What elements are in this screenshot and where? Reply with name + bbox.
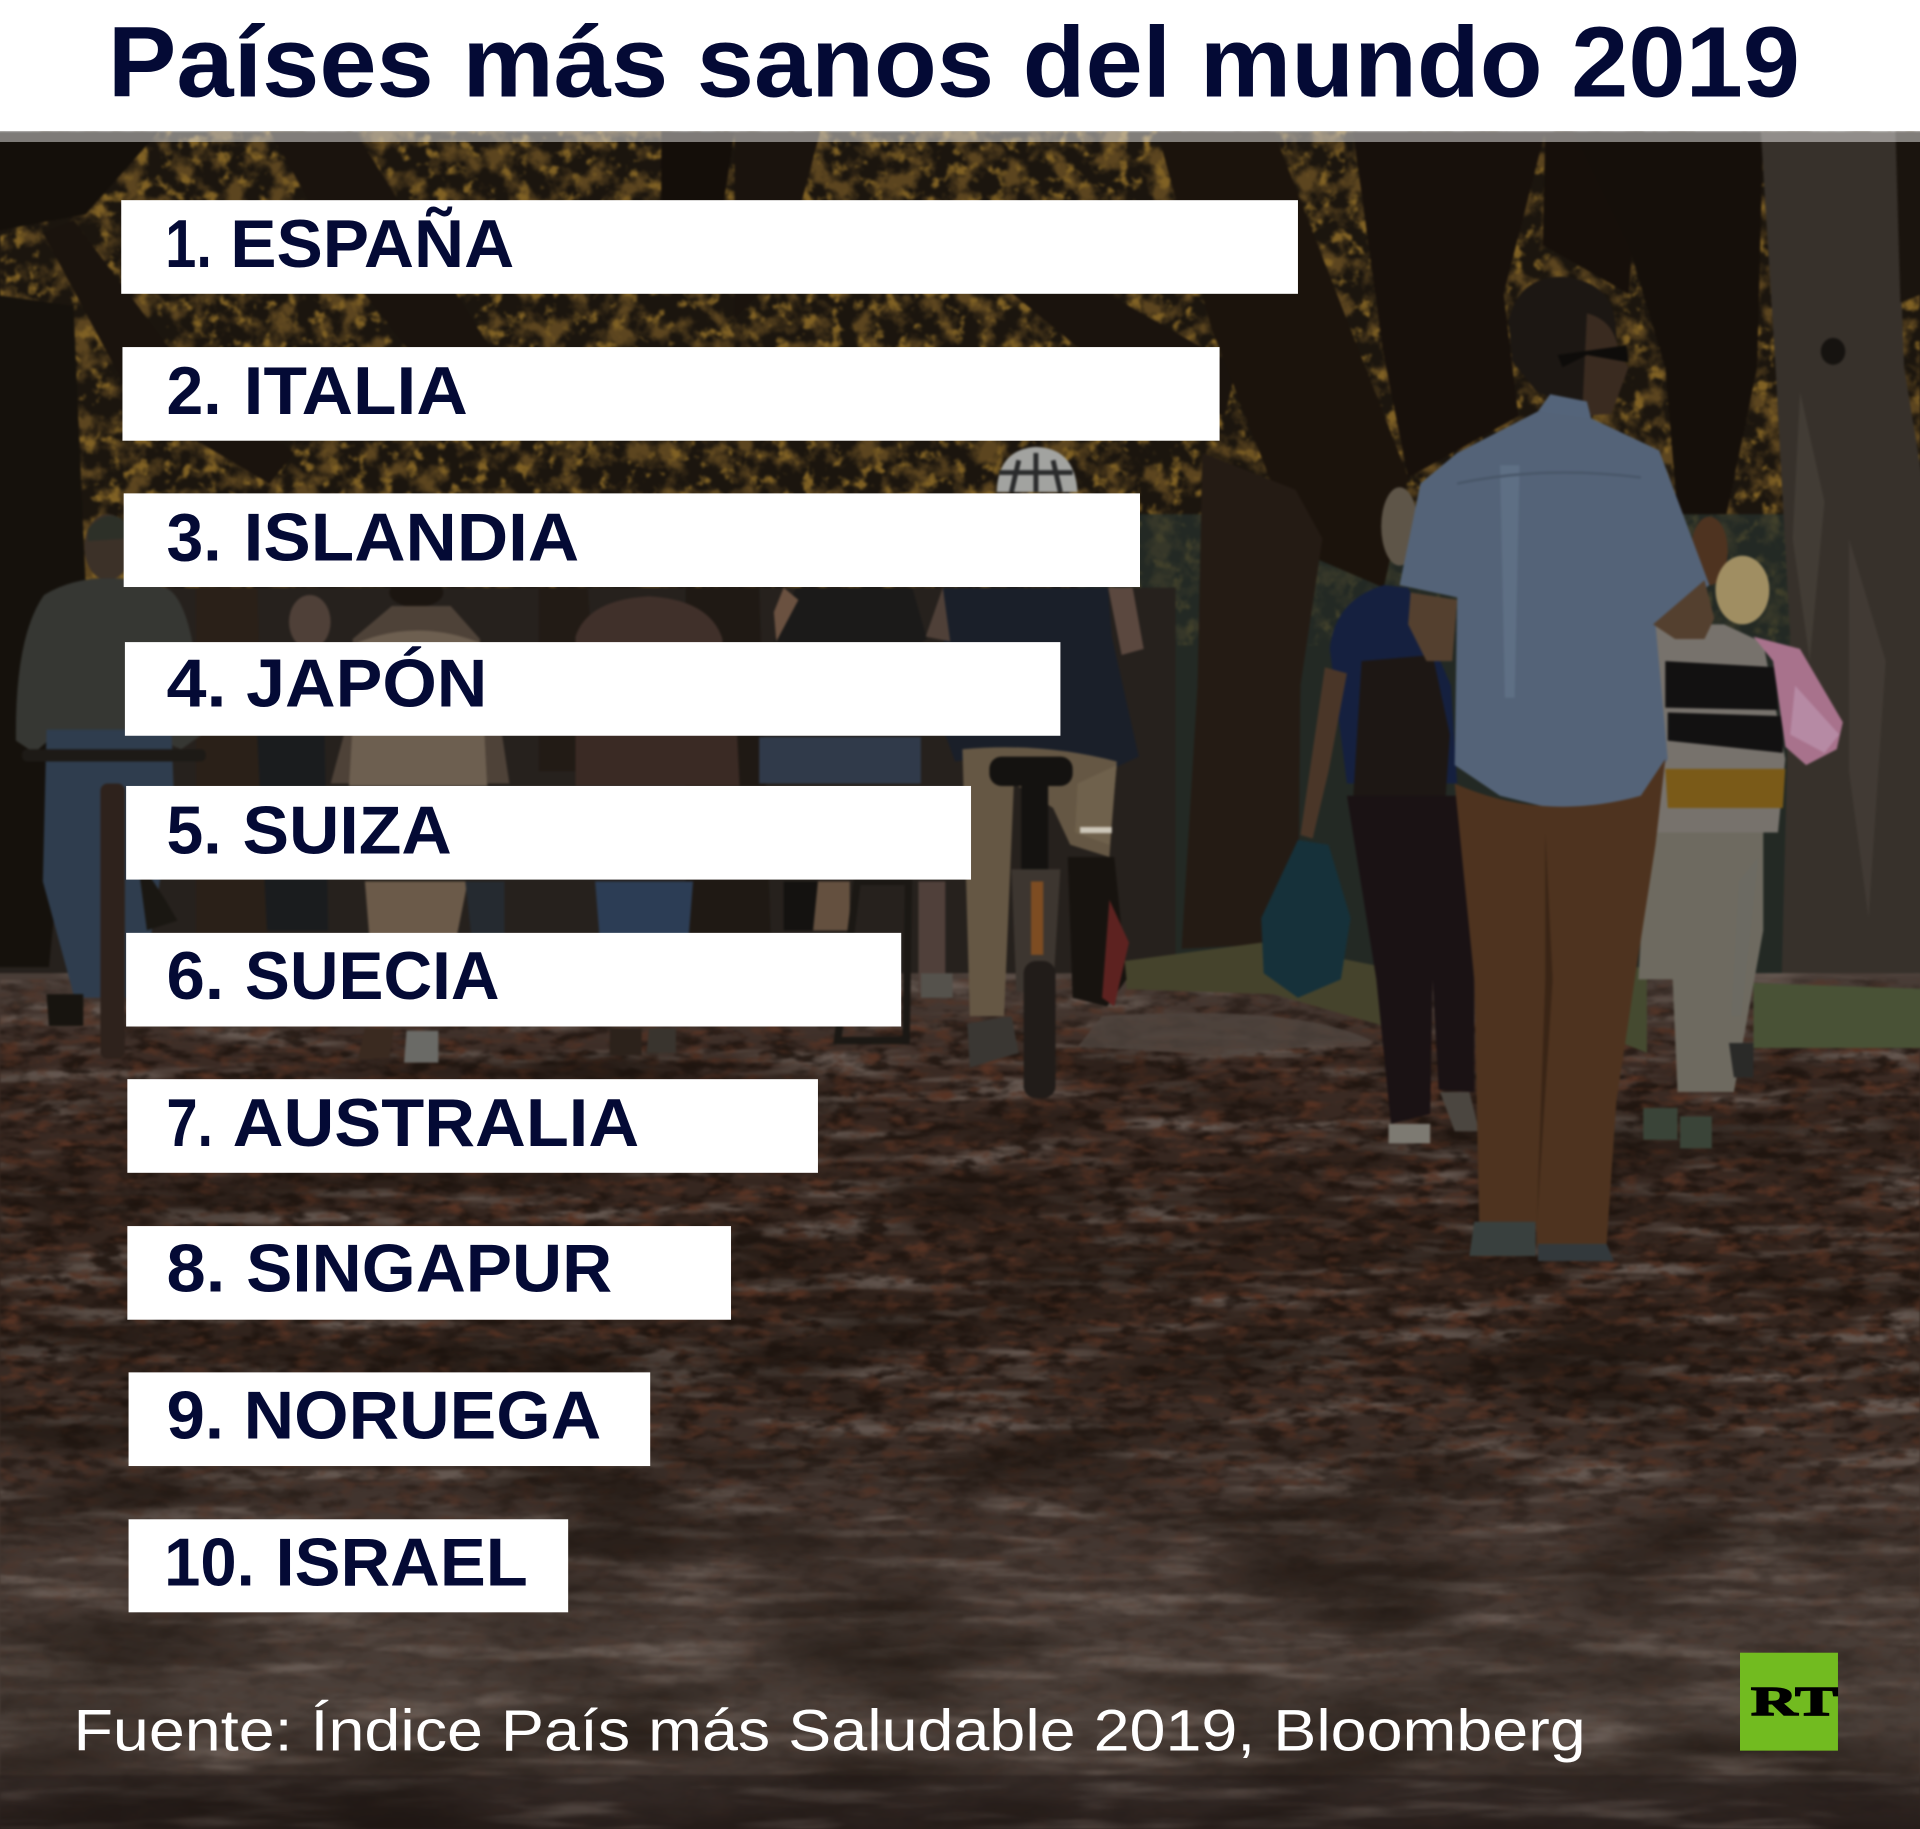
bar: 1. España: 1. <box>165 207 212 282</box>
bar: 7. Australia: AUSTRALIA <box>233 1086 639 1161</box>
bar: 4. Japón: JAPÓN <box>246 646 487 721</box>
bar: 4. Japón <box>125 642 1060 736</box>
pedestrians in the middle <box>257 578 953 1063</box>
bar: 8. Singapur: SINGAPUR <box>246 1232 612 1307</box>
RT logo <box>1740 1653 1838 1751</box>
ranking list <box>121 200 1298 1612</box>
bar: 4. Japón: 4. <box>167 646 227 721</box>
bar: 3. Islandia <box>124 493 1140 587</box>
man in blue shirt <box>1400 277 1714 1261</box>
canopy and foliage <box>0 131 1920 988</box>
RT logo: RT <box>1751 1679 1838 1725</box>
bar: 6. Suecia <box>126 933 901 1027</box>
bar: 2. Italia: 2. <box>167 354 222 429</box>
bar: 7. Australia <box>127 1079 818 1173</box>
bar: 3. Islandia: ISLANDIA <box>244 501 579 576</box>
bar: 8. Singapur <box>127 1226 731 1320</box>
person with backpack <box>1261 487 1479 1143</box>
bar: 6. Suecia: 6. <box>167 939 224 1014</box>
bar: 5. Suiza: SUIZA <box>242 793 452 868</box>
bar: 2. Italia <box>122 347 1220 441</box>
bar: 9. Noruega: NORUEGA <box>244 1378 601 1453</box>
bar: 10. Israel: ISRAEL <box>276 1525 528 1600</box>
bar: 7. Australia: 7. <box>167 1086 213 1161</box>
bar: 10. Israel <box>129 1519 568 1612</box>
person in striped sweater <box>1638 517 1785 1148</box>
bar: 2. Italia: ITALIA <box>244 354 468 429</box>
bar: 5. Suiza: 5. <box>167 793 222 868</box>
bar: 6. Suecia: SUECIA <box>245 939 500 1014</box>
ground with fallen leaves <box>0 973 1920 1829</box>
source line: Fuente: Índice País más Saludable 2019, Bloomberg <box>73 1699 1586 1764</box>
title: Países más sanos del mundo 2019 <box>108 7 1800 119</box>
cyclist with helmet <box>926 447 1144 1098</box>
grass <box>1124 943 1920 1053</box>
bar: 1. España <box>121 200 1298 294</box>
cyclist on the left <box>16 514 206 1059</box>
bar: 8. Singapur: 8. <box>167 1232 225 1307</box>
tree trunks and branches <box>0 131 1920 979</box>
bar: 9. Noruega <box>129 1372 650 1466</box>
bar: 3. Islandia: 3. <box>167 501 222 576</box>
bar: 1. España: ESPAÑA <box>230 207 514 282</box>
blonde person in pink <box>1716 556 1843 765</box>
title band <box>0 0 1920 142</box>
bar: 10. Israel: 10. <box>164 1525 255 1600</box>
bar: 9. Noruega: 9. <box>167 1378 224 1453</box>
bar: 5. Suiza <box>126 786 971 880</box>
